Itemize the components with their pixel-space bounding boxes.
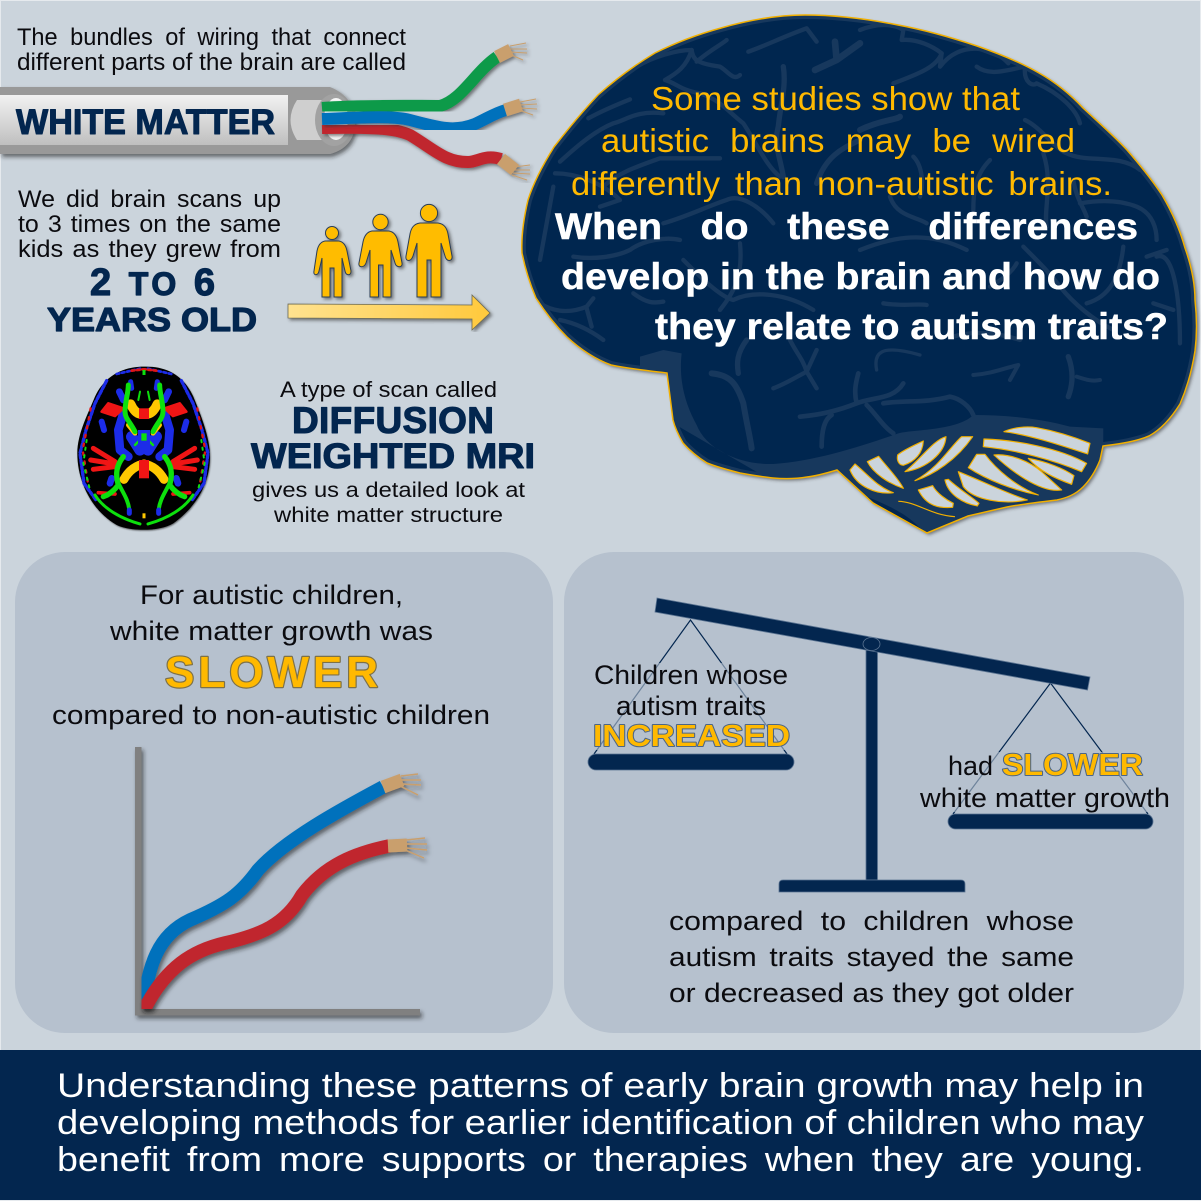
cerebellum darker fold	[868, 497, 922, 529]
curve: non-autistic (blue)	[143, 774, 421, 1010]
right pan	[948, 814, 1153, 829]
child medium	[359, 214, 402, 297]
curve: autistic (red)	[141, 838, 427, 1016]
right pan text	[919, 747, 1170, 813]
comparison text: autism traits stayed the same	[669, 942, 1074, 972]
scan centre	[129, 370, 159, 518]
conclusion banner: developing methods for earlier identification of children who may	[57, 1104, 1144, 1142]
conclusion banner: Understanding these patterns of early brain growth may help in	[57, 1067, 1144, 1105]
panel text: white matter growth was	[109, 616, 433, 646]
brain silhouette	[522, 15, 1196, 533]
brain sulci and cerebellum tissue	[522, 15, 1196, 537]
right pan text: white matter growth	[919, 783, 1170, 813]
wire: red	[322, 128, 530, 180]
conclusion banner	[0, 1050, 1201, 1200]
text: diffusion weighted MRI: white matter structure	[273, 504, 503, 527]
text: scans over time: YEARS OLD	[47, 301, 257, 338]
sulci: upper right	[860, 25, 1180, 343]
line chart: wire growth curves	[135, 747, 427, 1016]
intro text: white matter definition: different parts of the brain are called	[17, 49, 406, 76]
text: diffusion weighted MRI: gives us a detailed look at	[252, 479, 525, 502]
balance scale	[588, 598, 1153, 892]
icon: three growing children	[314, 204, 452, 297]
brain text: white question: develop in the brain and how do	[561, 256, 1160, 297]
panel: slower growth	[15, 552, 553, 1033]
chart axes	[135, 747, 420, 1016]
lower tissue band	[640, 350, 1103, 537]
cerebellum cut-outs	[850, 427, 1090, 517]
brain text: yellow: differently than non-autistic brains.	[571, 165, 1112, 202]
panel: balance scale	[564, 552, 1184, 1033]
brain text: yellow: autistic brains may be wired	[601, 122, 1075, 159]
brain text: white question: they relate to autism traits?	[655, 306, 1168, 347]
cable label band	[0, 95, 288, 145]
intro text: white matter definition: The bundles of wiring that connect	[17, 24, 406, 51]
brain outline	[522, 15, 1196, 533]
text: diffusion weighted MRI: WEIGHTED MRI	[251, 437, 535, 476]
left pan text: autism traits	[616, 691, 766, 721]
text: scans over time: to 3 times on the same	[18, 211, 281, 238]
intro text: white matter definition	[17, 24, 406, 76]
image: diffusion MRI brain scan	[77, 367, 210, 530]
comparison text	[669, 906, 1074, 1008]
left pan text: Children whose	[594, 660, 788, 690]
cable body	[0, 87, 355, 154]
brain text: white question: When do these differences	[555, 206, 1138, 247]
text: diffusion weighted MRI	[251, 377, 535, 527]
arrow: time	[288, 295, 490, 330]
brain text: yellow	[571, 80, 1112, 202]
child large	[406, 204, 452, 297]
conclusion banner: benefit from more supports or therapies when they are young.	[57, 1141, 1144, 1179]
scale stand	[866, 648, 878, 880]
right pan text: SLOWER	[1002, 747, 1143, 782]
illustration: white matter cable with coloured wires	[0, 43, 537, 180]
comparison text: compared to children whose	[669, 906, 1074, 936]
scale beam	[655, 598, 1090, 690]
text: scans over time: 2 TO 6	[90, 262, 215, 304]
sulci: upper left	[540, 28, 860, 340]
cable label: WHITE MATTER	[16, 103, 275, 142]
text: diffusion weighted MRI: A type of scan called	[280, 377, 497, 402]
left pan text	[592, 660, 790, 753]
text: scans over time	[18, 186, 281, 338]
brain text: white question	[555, 206, 1168, 347]
panel text	[52, 580, 490, 730]
text: scans over time: We did brain scans up	[18, 186, 281, 213]
panel text: SLOWER	[165, 648, 378, 697]
wire: blue	[322, 99, 537, 128]
comparison text: or decreased as they got older	[669, 978, 1074, 1008]
text: diffusion weighted MRI: DIFFUSION	[292, 400, 494, 441]
left pan	[588, 754, 794, 770]
scale strings	[594, 620, 1148, 814]
brain panel	[522, 15, 1196, 537]
panel text: For autistic children,	[140, 580, 403, 610]
child small	[314, 226, 351, 297]
scan left half	[80, 368, 144, 524]
right pan text: had	[948, 751, 993, 781]
panel text: compared to non-autistic children	[52, 700, 490, 730]
text: scans over time: kids as they grew from	[18, 236, 281, 263]
brain text: yellow: Some studies show that	[651, 80, 1020, 117]
wire: green	[322, 43, 527, 108]
left pan text: INCREASED	[593, 718, 790, 753]
sulci: lower	[712, 340, 1100, 448]
